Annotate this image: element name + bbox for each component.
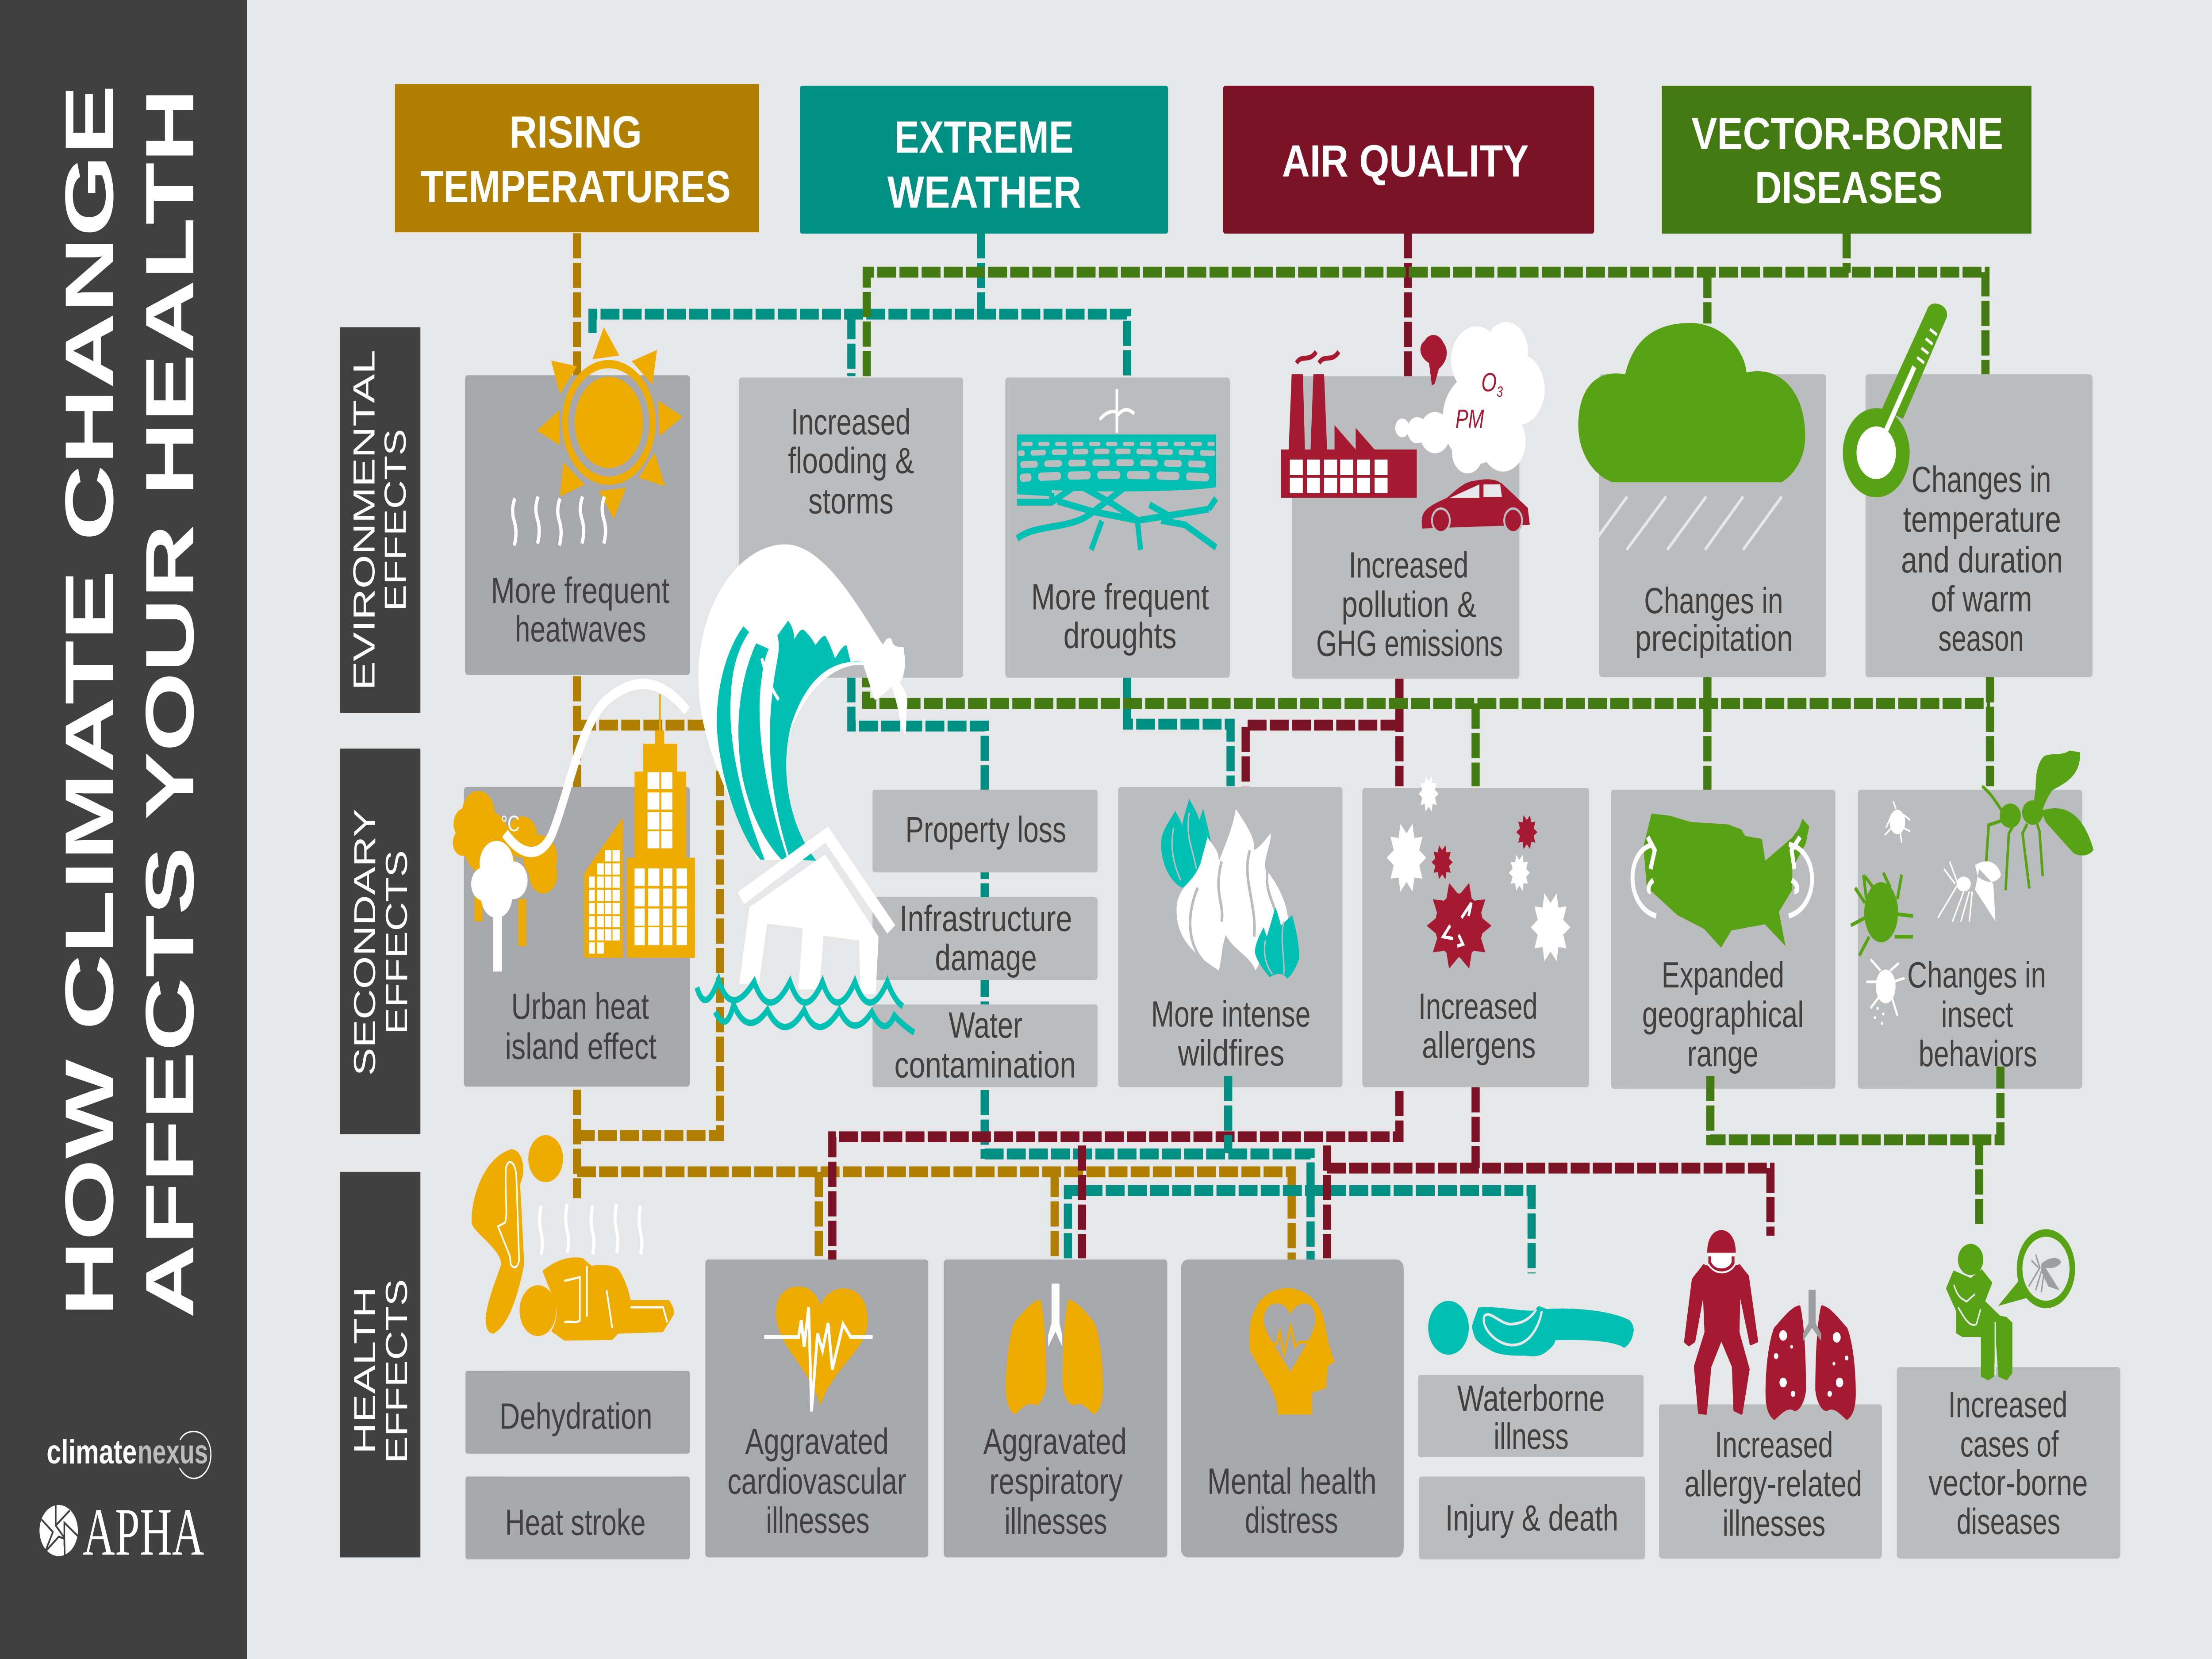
row label: secondary effects: EFFECTS (380, 850, 414, 1034)
panel: droughts: More frequent (1031, 576, 1209, 618)
header: extreme weather: WEATHER (887, 167, 1081, 218)
gold connectors (577, 233, 1292, 1260)
panel: flooding: storms (808, 480, 894, 522)
panel: warm season (1866, 374, 2093, 677)
panel: insect behaviors: insect (1941, 994, 2013, 1035)
logo: climate nexus (46, 1432, 211, 1479)
panel: injury and death: Injury & death (1445, 1498, 1618, 1539)
panel: mental health: Mental health (1207, 1461, 1377, 1502)
icon: insects (1851, 750, 2093, 1023)
connector lines behind panels (577, 233, 1990, 1273)
panel: cardiovascular: illnesses (766, 1500, 870, 1541)
panel: geographical range: range (1687, 1033, 1759, 1074)
panel: heatwaves (465, 375, 690, 675)
large green mosquito (1982, 750, 2093, 890)
panel: vector-borne cases: cases of (1960, 1424, 2059, 1465)
header: rising temperatures: TEMPERATURES (420, 161, 731, 212)
panel: dehydration (465, 1371, 690, 1454)
icon: person with mask (1685, 1230, 1757, 1413)
icon: wildfire (1161, 799, 1299, 979)
panel: urban heat island (464, 787, 690, 1087)
title (51, 84, 208, 1318)
panel: allergy illnesses: Increased (1715, 1424, 1833, 1465)
header: vector-borne diseases (1662, 86, 2032, 234)
panel: insect behaviors: Changes in (1907, 954, 2046, 995)
panel: precipitation: precipitation (1635, 618, 1793, 659)
icon: allergens (1387, 776, 1570, 969)
panel: pollution: Increased (1348, 545, 1469, 585)
row label: secondary effects: SECONDARY (348, 809, 382, 1076)
panel: urban heat island: Urban heat (511, 986, 649, 1027)
burgundy connectors (832, 233, 1770, 1268)
icon: lungs with allergens (1766, 1290, 1856, 1420)
panel: property loss (872, 790, 1098, 872)
icon: US map with arrows (1632, 814, 1812, 948)
panel: allergens (1362, 788, 1589, 1087)
green connectors (866, 233, 1990, 1225)
icon: urban heat island: °C (501, 811, 520, 837)
row label: secondary effects (340, 749, 420, 1134)
panel: warm season: Changes in (1912, 459, 2051, 500)
white mosquito (1938, 861, 2001, 922)
header: air quality (1223, 86, 1594, 234)
row label: environmental effects: EFFECTS (379, 429, 412, 611)
icon: sun (513, 327, 683, 545)
panel: heatwaves: heatwaves (515, 608, 646, 649)
icon: lungs (1006, 1283, 1103, 1414)
panel: infrastructure damage: Infrastructure (899, 898, 1072, 939)
panel: injury and death (1419, 1477, 1645, 1559)
panel: infrastructure damage (872, 897, 1098, 980)
icon: heart with ECG (764, 1286, 873, 1411)
row label: environmental effects (340, 327, 420, 713)
row label: health effects: HEALTH (348, 1286, 382, 1454)
panel: infrastructure damage: damage (935, 937, 1037, 978)
header: extreme weather: EXTREME (895, 112, 1074, 163)
panel: pollution: GHG emissions (1316, 623, 1503, 664)
panel: respiratory (944, 1260, 1167, 1557)
green tick (1851, 873, 1913, 956)
panel: property loss: Property loss (906, 809, 1066, 850)
icon: rain cloud (1578, 323, 1805, 550)
panel: flooding: flooding & (788, 440, 914, 481)
panel: heat stroke: Heat stroke (505, 1502, 646, 1543)
logo: APHA: APHA (83, 1494, 204, 1570)
icon: thermometer (1843, 303, 1947, 497)
panel: insect behaviors (1858, 790, 2082, 1089)
icon: factory, cloud and car: 3 (1497, 384, 1503, 400)
panel: warm season: of warm (1931, 578, 2032, 619)
panel: mental health: distress (1245, 1500, 1338, 1541)
panel: precipitation (1599, 374, 1826, 677)
panel: allergy illnesses (1659, 1404, 1882, 1559)
teal connectors (592, 233, 1532, 1273)
icon: cracked earth (1017, 389, 1216, 550)
header: air quality: AIR QUALITY (1282, 136, 1529, 187)
panel: vector-borne cases: diseases (1957, 1501, 2060, 1542)
panel: water contamination: Water (949, 1005, 1022, 1046)
panel: vector-borne cases: vector-borne (1928, 1462, 2088, 1503)
header: extreme weather (800, 86, 1168, 234)
white bug (1866, 959, 1905, 1023)
panel: wildfires: wildfires (1178, 1033, 1284, 1074)
row label: health effects: EFFECTS (380, 1279, 414, 1463)
panel: waterborne illness: Waterborne (1457, 1378, 1605, 1419)
panel: pollution (1292, 376, 1519, 679)
panel: warm season: temperature (1903, 499, 2061, 540)
panel: mental health (1181, 1260, 1404, 1557)
panel: waterborne illness: illness (1494, 1416, 1569, 1457)
icon: person in water (1428, 1301, 1634, 1356)
panel: vector-borne cases: Increased (1948, 1384, 2067, 1425)
panel: precipitation: Changes in (1644, 580, 1783, 621)
panel: cardiovascular: cardiovascular (727, 1461, 906, 1502)
panel: water contamination (872, 1004, 1098, 1087)
panel: heatwaves: More frequent (491, 570, 669, 611)
sidebar (0, 0, 247, 1659)
connector lines over panels (1228, 1067, 2001, 1153)
panel: respiratory: illnesses (1004, 1501, 1107, 1542)
title: AFFECTS YOUR HEALTH (131, 88, 208, 1318)
panel: water contamination: contamination (895, 1045, 1076, 1085)
panel: geographical range (1611, 790, 1836, 1089)
header: vector-borne diseases: VECTOR-BORNE (1691, 109, 2003, 159)
white mite (1885, 801, 1910, 843)
icon: head with heart (1249, 1288, 1335, 1414)
header: rising temperatures: RISING (509, 107, 642, 157)
panel: geographical range: Expanded (1662, 954, 1784, 995)
panel: allergens: allergens (1422, 1025, 1536, 1066)
title: HOW CLIMATE CHANGE (51, 84, 127, 1317)
panel: heat stroke (465, 1477, 690, 1559)
icon: person with mosquito thought bubble (1947, 1233, 2072, 1379)
panel: warm season: season (1938, 618, 2024, 659)
icon: factory, cloud and car: O (1481, 368, 1497, 397)
panel: warm season: and duration (1901, 539, 2063, 580)
logo: climate nexus: climate (46, 1433, 137, 1471)
panel: cardiovascular (705, 1260, 928, 1557)
logo: climate nexus: nexus (138, 1433, 208, 1471)
panel: droughts (1005, 377, 1230, 678)
panel: allergens: Increased (1418, 986, 1538, 1027)
icon: heat-stricken figures (472, 1135, 673, 1339)
panel: allergy illnesses: allergy-related (1684, 1463, 1862, 1504)
panel: pollution: pollution & (1342, 584, 1476, 625)
header: vector-borne diseases: DISEASES (1755, 163, 1943, 213)
row label: environmental effects: EVIRONMENTAL (347, 350, 381, 690)
panel: urban heat island: island effect (505, 1026, 657, 1067)
panel: vector-borne cases (1897, 1367, 2120, 1559)
panel: wildfires (1118, 787, 1342, 1087)
logo: APHA (39, 1494, 204, 1570)
icon: tidal wave and flooded house (697, 544, 914, 1033)
panel: respiratory: Aggravated (983, 1421, 1127, 1462)
panel: flooding: Increased (791, 401, 910, 442)
panel: geographical range: geographical (1642, 994, 1804, 1035)
icon: factory, cloud and car: PM (1455, 404, 1484, 434)
panel: allergy illnesses: illnesses (1722, 1503, 1825, 1544)
panel: flooding (739, 377, 963, 678)
icon: factory, cloud and car (1281, 322, 1545, 532)
panel: waterborne illness (1418, 1375, 1644, 1457)
panel: respiratory: respiratory (989, 1461, 1123, 1502)
header: rising temperatures (395, 84, 759, 232)
panel: droughts: droughts (1064, 615, 1176, 656)
panel: cardiovascular: Aggravated (745, 1421, 889, 1462)
icon: urban heat island (453, 684, 695, 972)
panel: dehydration: Dehydration (499, 1396, 652, 1437)
panel: wildfires: More intense (1151, 994, 1310, 1035)
row label: health effects (340, 1172, 420, 1557)
panel: insect behaviors: behaviors (1919, 1033, 2037, 1074)
